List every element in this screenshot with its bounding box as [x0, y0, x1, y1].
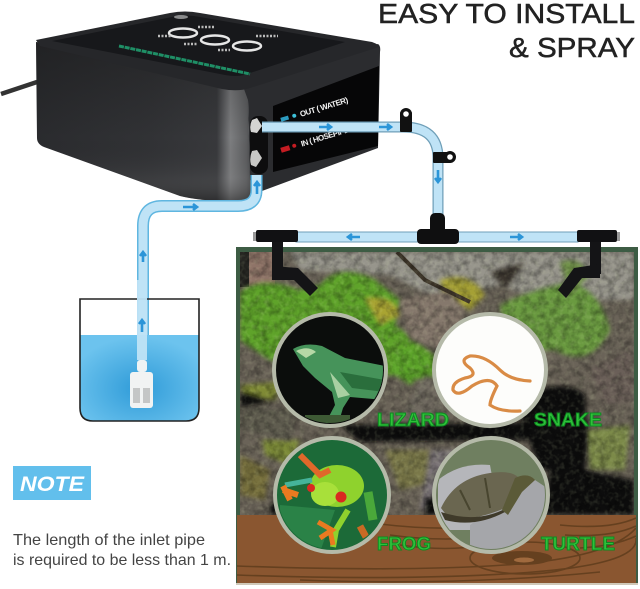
water	[80, 335, 199, 421]
rock texture	[240, 252, 634, 515]
frog	[310, 465, 364, 507]
box front face	[36, 42, 262, 201]
turtle label: TURTLE	[541, 534, 615, 554]
branch	[397, 252, 470, 302]
flow arrows spray line	[348, 234, 522, 240]
top panel	[52, 16, 345, 76]
note badge: NOTE	[20, 473, 85, 496]
note text	[13, 532, 231, 569]
spray line pipe	[296, 232, 578, 242]
port housing	[250, 116, 268, 174]
out water label: OUT ( WATER)	[299, 95, 350, 119]
left pipe fitting	[253, 230, 298, 242]
pipe in beaker	[137, 280, 147, 360]
box front shading	[36, 42, 262, 201]
left spray nozzle	[272, 240, 318, 296]
tee fitting center	[417, 213, 459, 244]
out water label	[280, 95, 350, 125]
turtle circle	[434, 438, 550, 552]
frog circle	[275, 438, 389, 552]
moss patches	[240, 260, 630, 500]
lizard label: LIZARD	[377, 410, 449, 430]
filter	[130, 360, 153, 408]
control box device	[36, 12, 380, 201]
snake label: SNAKE	[534, 410, 602, 430]
box right face	[240, 44, 380, 191]
terrarium background	[240, 252, 634, 515]
wood floor	[237, 515, 636, 583]
tube clip top	[400, 108, 412, 132]
terrarium	[236, 240, 638, 585]
snake	[453, 356, 530, 411]
in hose label: IN ( HOSEPIPE	[300, 125, 351, 148]
box top face	[36, 12, 379, 90]
terrarium frame	[236, 247, 638, 585]
frog label: FROG	[377, 534, 431, 554]
outlet port	[250, 118, 262, 133]
lizard circle	[274, 314, 386, 426]
dark hollows	[240, 262, 634, 515]
top rock band	[290, 252, 634, 300]
outlet pipe	[262, 124, 441, 216]
beaker outline	[80, 299, 199, 421]
power cable	[1, 82, 37, 94]
in hose label	[280, 125, 351, 155]
flow arrows outlet	[319, 124, 441, 182]
inlet pipe	[140, 175, 260, 362]
top panel icons	[158, 27, 278, 50]
water beaker	[80, 280, 199, 421]
rocks	[242, 288, 465, 510]
tube clip side	[433, 151, 456, 163]
note text: is required to be less than 1 m.	[13, 552, 231, 569]
right pipe fitting	[577, 230, 620, 242]
snake circle	[434, 314, 546, 426]
flow arrows inlet	[140, 182, 260, 262]
green panel text	[119, 46, 250, 74]
note text: The length of the inlet pipe	[13, 532, 205, 549]
port label panel	[273, 66, 379, 172]
inlet port	[250, 150, 262, 167]
note badge	[13, 466, 91, 500]
right spray nozzle	[558, 240, 601, 298]
lizard	[293, 345, 385, 424]
title: & SPRAY	[509, 32, 635, 63]
title	[378, 0, 635, 63]
turtle	[441, 472, 518, 520]
